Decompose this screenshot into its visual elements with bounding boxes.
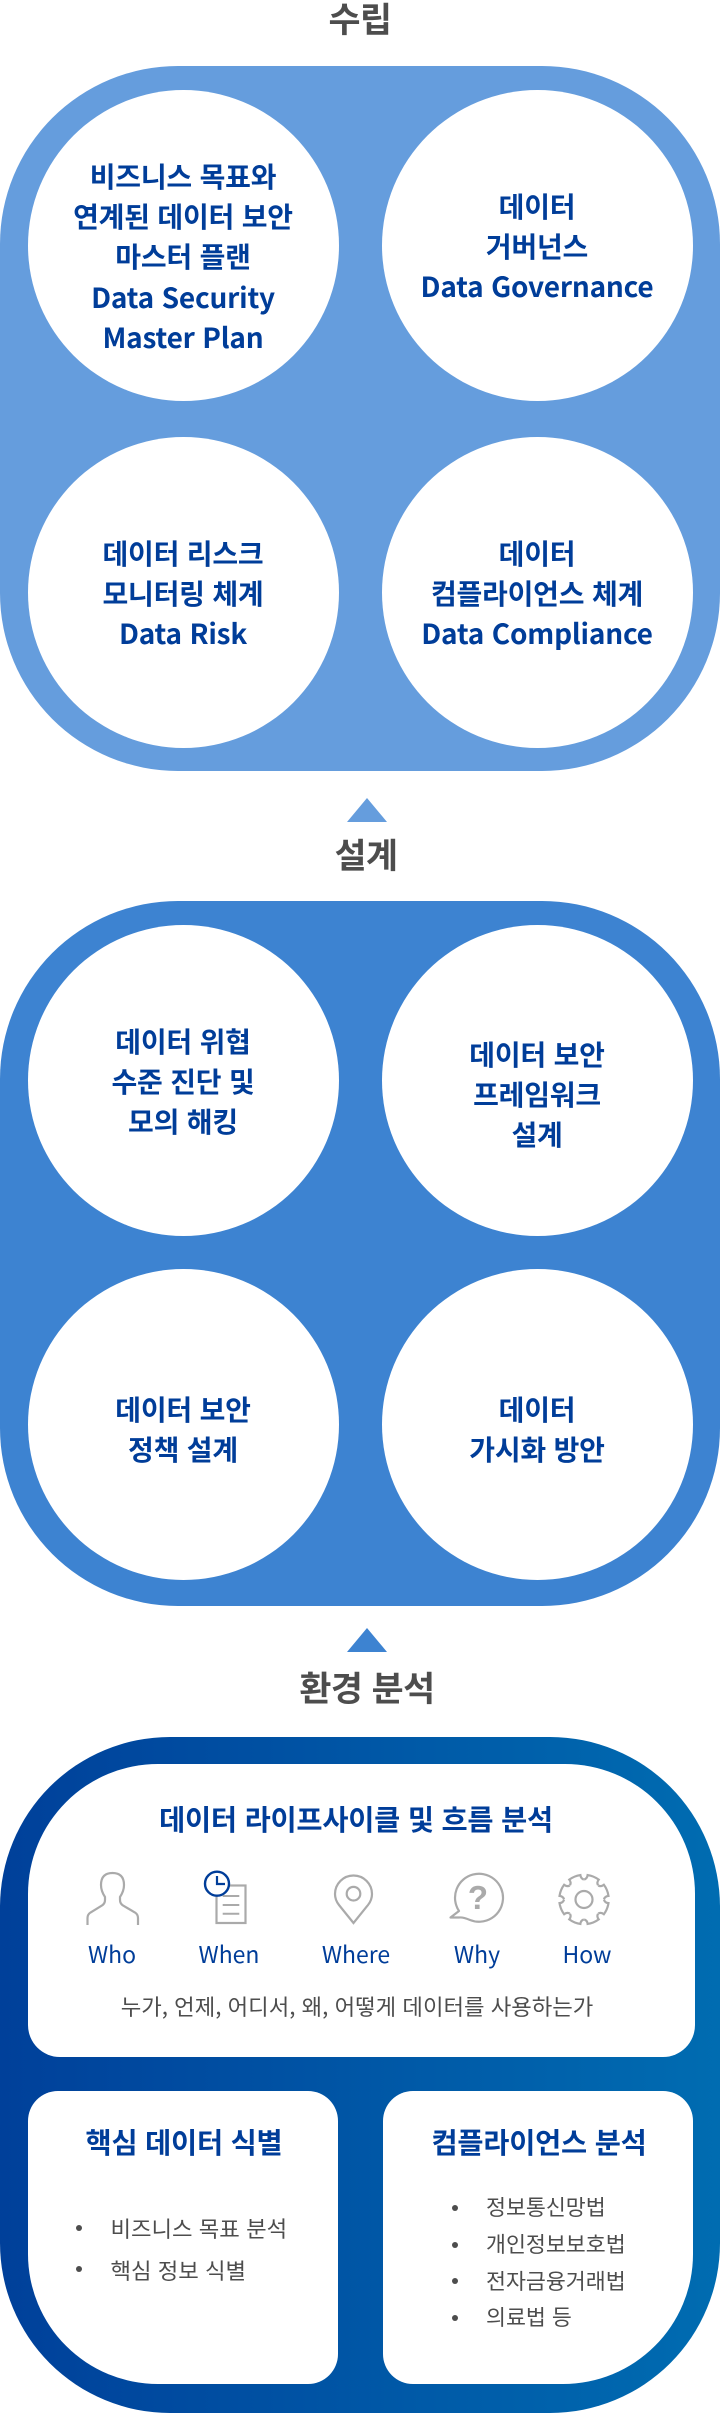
- bullet list: 핵심 정보 식별: [110, 2254, 246, 2286]
- card: compliance analysis: [382, 2091, 693, 2384]
- circle: data security master plan: Master Plan: [102, 317, 264, 357]
- circle: data risk monitoring: 모니터링 체계: [102, 573, 264, 613]
- icon: map pin: [335, 1876, 372, 1923]
- bullet list: [452, 2191, 626, 2332]
- circle: security framework: 설계: [511, 1114, 563, 1154]
- label: How: How: [562, 1936, 612, 1970]
- card title: 컴플라이언스 분석: [431, 2121, 647, 2162]
- circle: visibility: 데이터: [499, 1389, 575, 1429]
- bullet list: 전자금융거래법: [486, 2265, 626, 2296]
- circle: data security master plan: Data Security: [91, 277, 275, 317]
- circle: threat assessment: 데이터 위협: [115, 1021, 251, 1061]
- circle: security framework: 데이터 보안: [469, 1034, 605, 1074]
- bullet list: 정보통신망법: [486, 2191, 606, 2222]
- bullet list: [76, 2212, 287, 2286]
- icon: document with clock: [205, 1872, 246, 1923]
- panel: 설계: [0, 901, 720, 1606]
- circle: data governance: 데이터: [499, 186, 575, 226]
- circle: security policy: 정책 설계: [128, 1429, 238, 1469]
- icon: question bubble: [450, 1874, 503, 1922]
- circle: visibility: [382, 1269, 692, 1580]
- circle: data governance: [382, 90, 692, 401]
- circle: data compliance: 컴플라이언스 체계: [431, 573, 643, 613]
- card: core data identification: [28, 2091, 338, 2384]
- circle: data governance: Data Governance: [421, 266, 653, 306]
- card title: 핵심 데이터 식별: [86, 2121, 282, 2162]
- circle: data security master plan: 비즈니스 목표와: [90, 156, 276, 196]
- circle: data risk monitoring: [28, 437, 338, 748]
- bullet list: 개인정보보호법: [486, 2228, 626, 2259]
- card title: 데이터 라이프사이클 및 흐름 분석: [159, 1798, 553, 1838]
- icon: person: [88, 1873, 138, 1925]
- circle: data security master plan: 마스터 플랜: [115, 236, 251, 276]
- circle: data security master plan: [28, 90, 338, 401]
- arrow: 환경 분석 to 설계: [347, 1628, 387, 1652]
- panel: 수립: [0, 66, 720, 771]
- circle: data risk monitoring: Data Risk: [119, 613, 247, 653]
- circle: data security master plan: 연계된 데이터 보안: [73, 196, 293, 236]
- circle: threat assessment: 수준 진단 및: [111, 1061, 255, 1101]
- circle: security framework: 프레임워크: [473, 1074, 601, 1114]
- heading: 설계: 설계: [334, 829, 398, 879]
- circle: data governance: 거버넌스: [486, 226, 588, 266]
- card: lifecycle and flow analysis: [28, 1764, 695, 2057]
- circle: visibility: 가시화 방안: [469, 1429, 605, 1469]
- arrow: 설계 to 수립: [347, 798, 387, 822]
- label: Why: Why: [454, 1936, 500, 1970]
- icon: gear: [558, 1874, 610, 1925]
- circle: data risk monitoring: 데이터 리스크: [102, 533, 264, 573]
- icon group: 5W1H: [86, 1870, 610, 1926]
- label: Who: Who: [88, 1936, 136, 1970]
- circle: data compliance: Data Compliance: [421, 613, 653, 653]
- circle: data compliance: [382, 437, 692, 748]
- circle: data compliance: 데이터: [499, 533, 575, 573]
- circle: security policy: [28, 1269, 338, 1580]
- panel: 환경 분석: [0, 1737, 720, 2413]
- label: When: When: [199, 1936, 259, 1970]
- bullet list: 비즈니스 목표 분석: [110, 2212, 287, 2244]
- bullet list: 의료법 등: [486, 2301, 572, 2332]
- description: 누가, 언제, 어디서, 왜, 어떻게 데이터를 사용하는가: [121, 1990, 593, 2022]
- circle: security policy: 데이터 보안: [115, 1389, 251, 1429]
- icon: question bubble: ?: [468, 1879, 488, 1916]
- circle: threat assessment: [28, 925, 338, 1236]
- circle: security framework: [382, 925, 692, 1236]
- label: Where: Where: [322, 1936, 390, 1970]
- circle: threat assessment: 모의 해킹: [128, 1101, 238, 1141]
- heading: 환경 분석: 환경 분석: [299, 1662, 435, 1712]
